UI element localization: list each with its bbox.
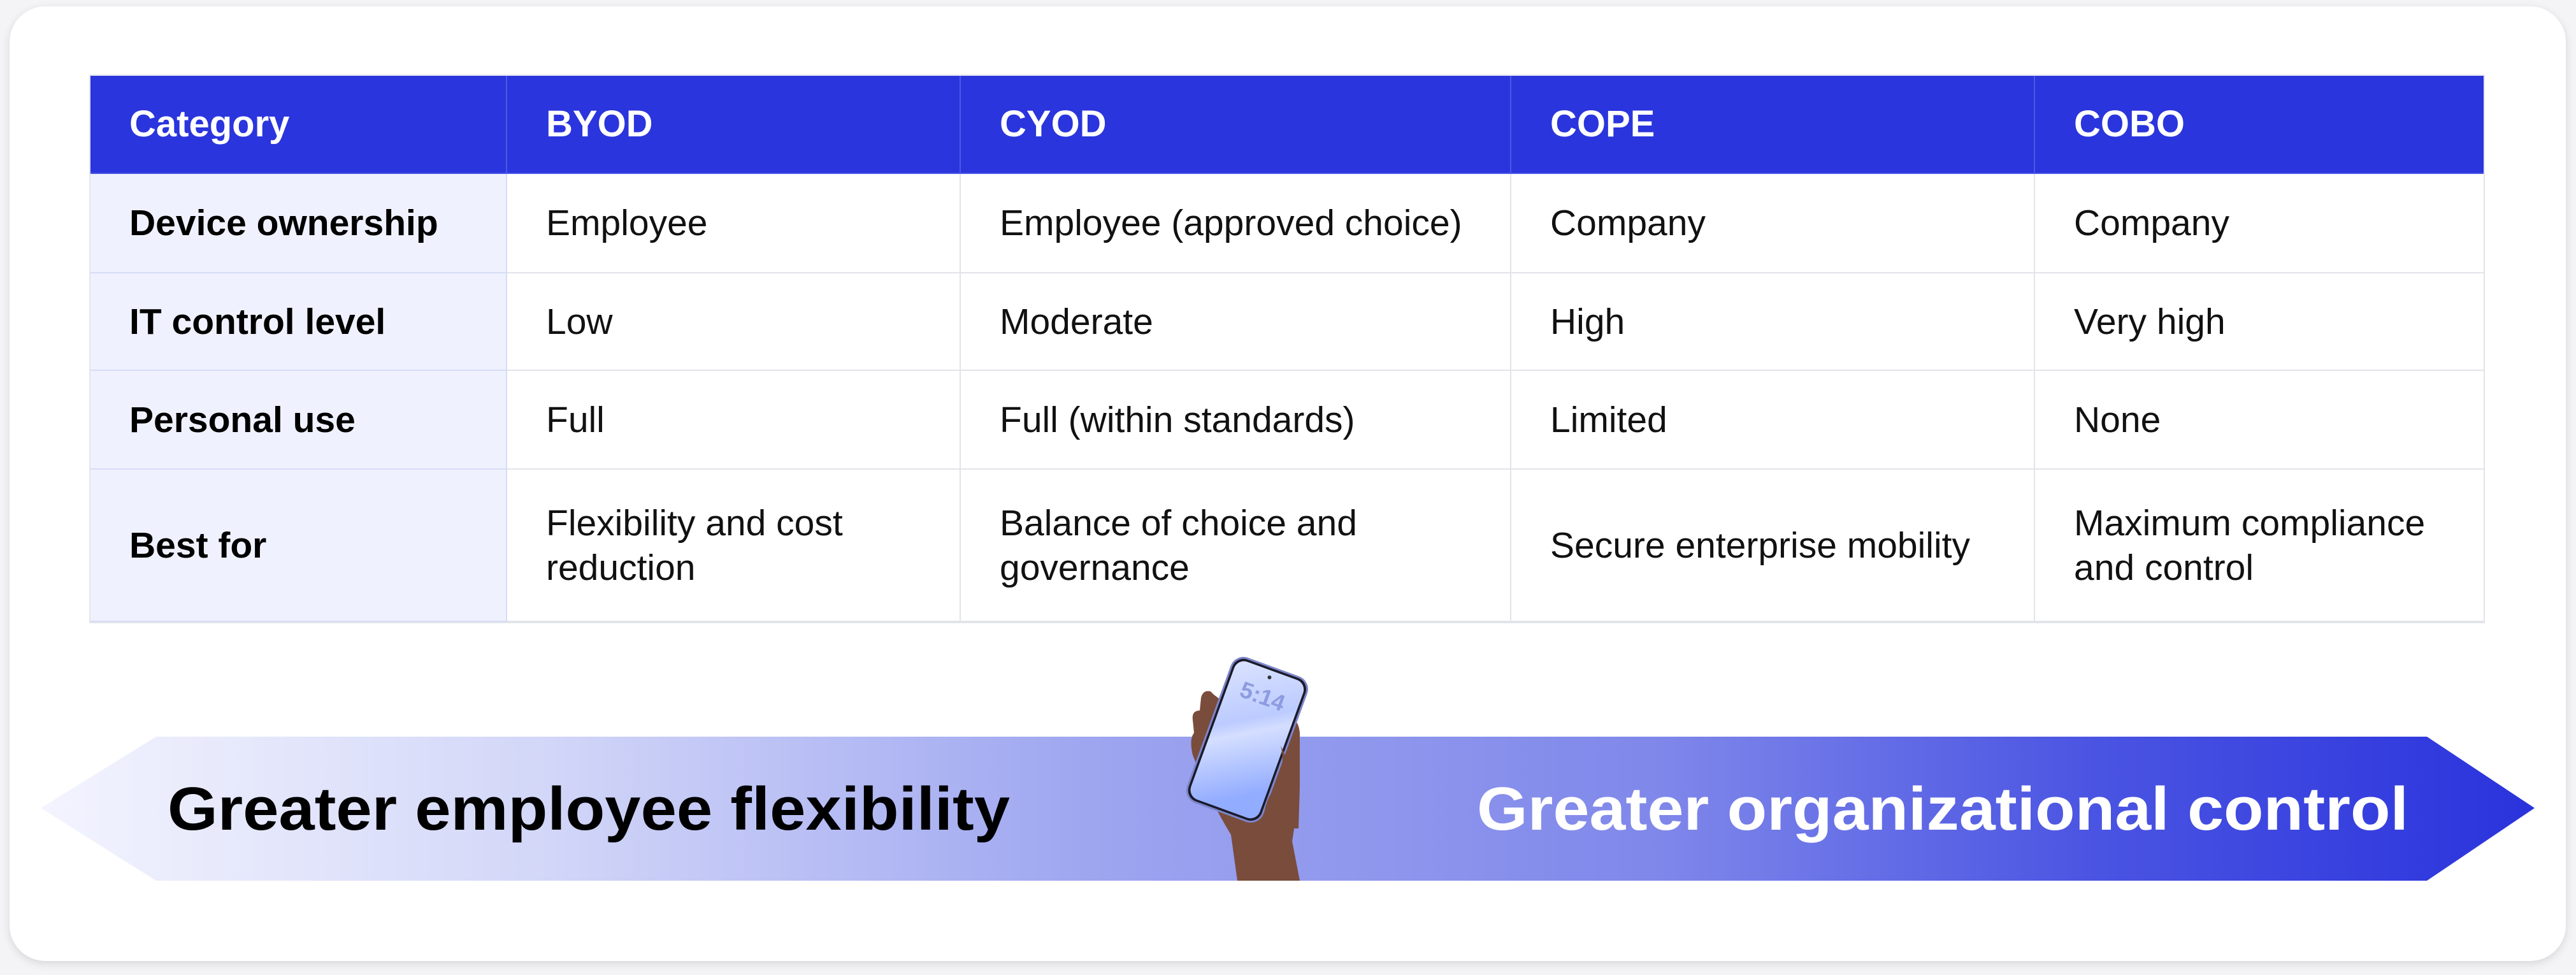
thumb over phone	[1264, 746, 1300, 828]
row: device ownership: Employee (approved choice)	[1000, 203, 1462, 243]
header row: CYOD	[1000, 103, 1107, 145]
comparison table	[89, 75, 2485, 623]
row: IT control level: Very high	[2074, 301, 2226, 342]
row: best for: Flexibility and cost	[546, 502, 843, 543]
header row	[90, 76, 2484, 174]
row: personal use: Full (within standards)	[1000, 399, 1355, 440]
header row: Category	[129, 103, 289, 145]
double-headed arrow	[41, 737, 2535, 881]
row: IT control level: High	[1550, 301, 1625, 342]
row: best for: Balance of choice and	[1000, 502, 1357, 543]
row: device ownership: Company	[1550, 203, 1706, 243]
row: personal use: Full	[546, 399, 605, 440]
row: best for: Secure enterprise mobility	[1550, 525, 1970, 566]
row: best for: Best for	[129, 525, 266, 566]
row: personal use: None	[2074, 399, 2161, 440]
row: device ownership: Device ownership	[129, 203, 438, 243]
icon: hand holding phone	[1184, 654, 1311, 881]
row: personal use	[90, 371, 2484, 470]
row: best for: Maximum compliance	[2074, 502, 2425, 543]
row: IT control level	[90, 273, 2484, 371]
phone	[1184, 654, 1311, 825]
row: personal use: Limited	[1550, 399, 1667, 440]
row: IT control level: Moderate	[1000, 301, 1153, 342]
row: IT control level: Low	[546, 301, 613, 342]
row: IT control level: IT control level	[129, 301, 385, 342]
header row: COBO	[2074, 103, 2185, 145]
row: best for: and control	[2074, 547, 2254, 588]
row: personal use: Personal use	[129, 399, 356, 440]
row: device ownership: Company	[2074, 203, 2229, 243]
row: best for: governance	[1000, 547, 1190, 588]
phone clock: 5:14	[1237, 676, 1289, 716]
forearm and hand	[1191, 691, 1300, 881]
row: device ownership: Employee	[546, 203, 707, 243]
label: right: Greater organizational control	[1477, 775, 2408, 843]
header row: COPE	[1550, 103, 1655, 145]
label: left: Greater employee flexibility	[168, 775, 1010, 843]
row: best for	[90, 470, 2484, 622]
header row: BYOD	[546, 103, 653, 145]
row: device ownership	[90, 174, 2484, 273]
row: best for: reduction	[546, 547, 696, 588]
